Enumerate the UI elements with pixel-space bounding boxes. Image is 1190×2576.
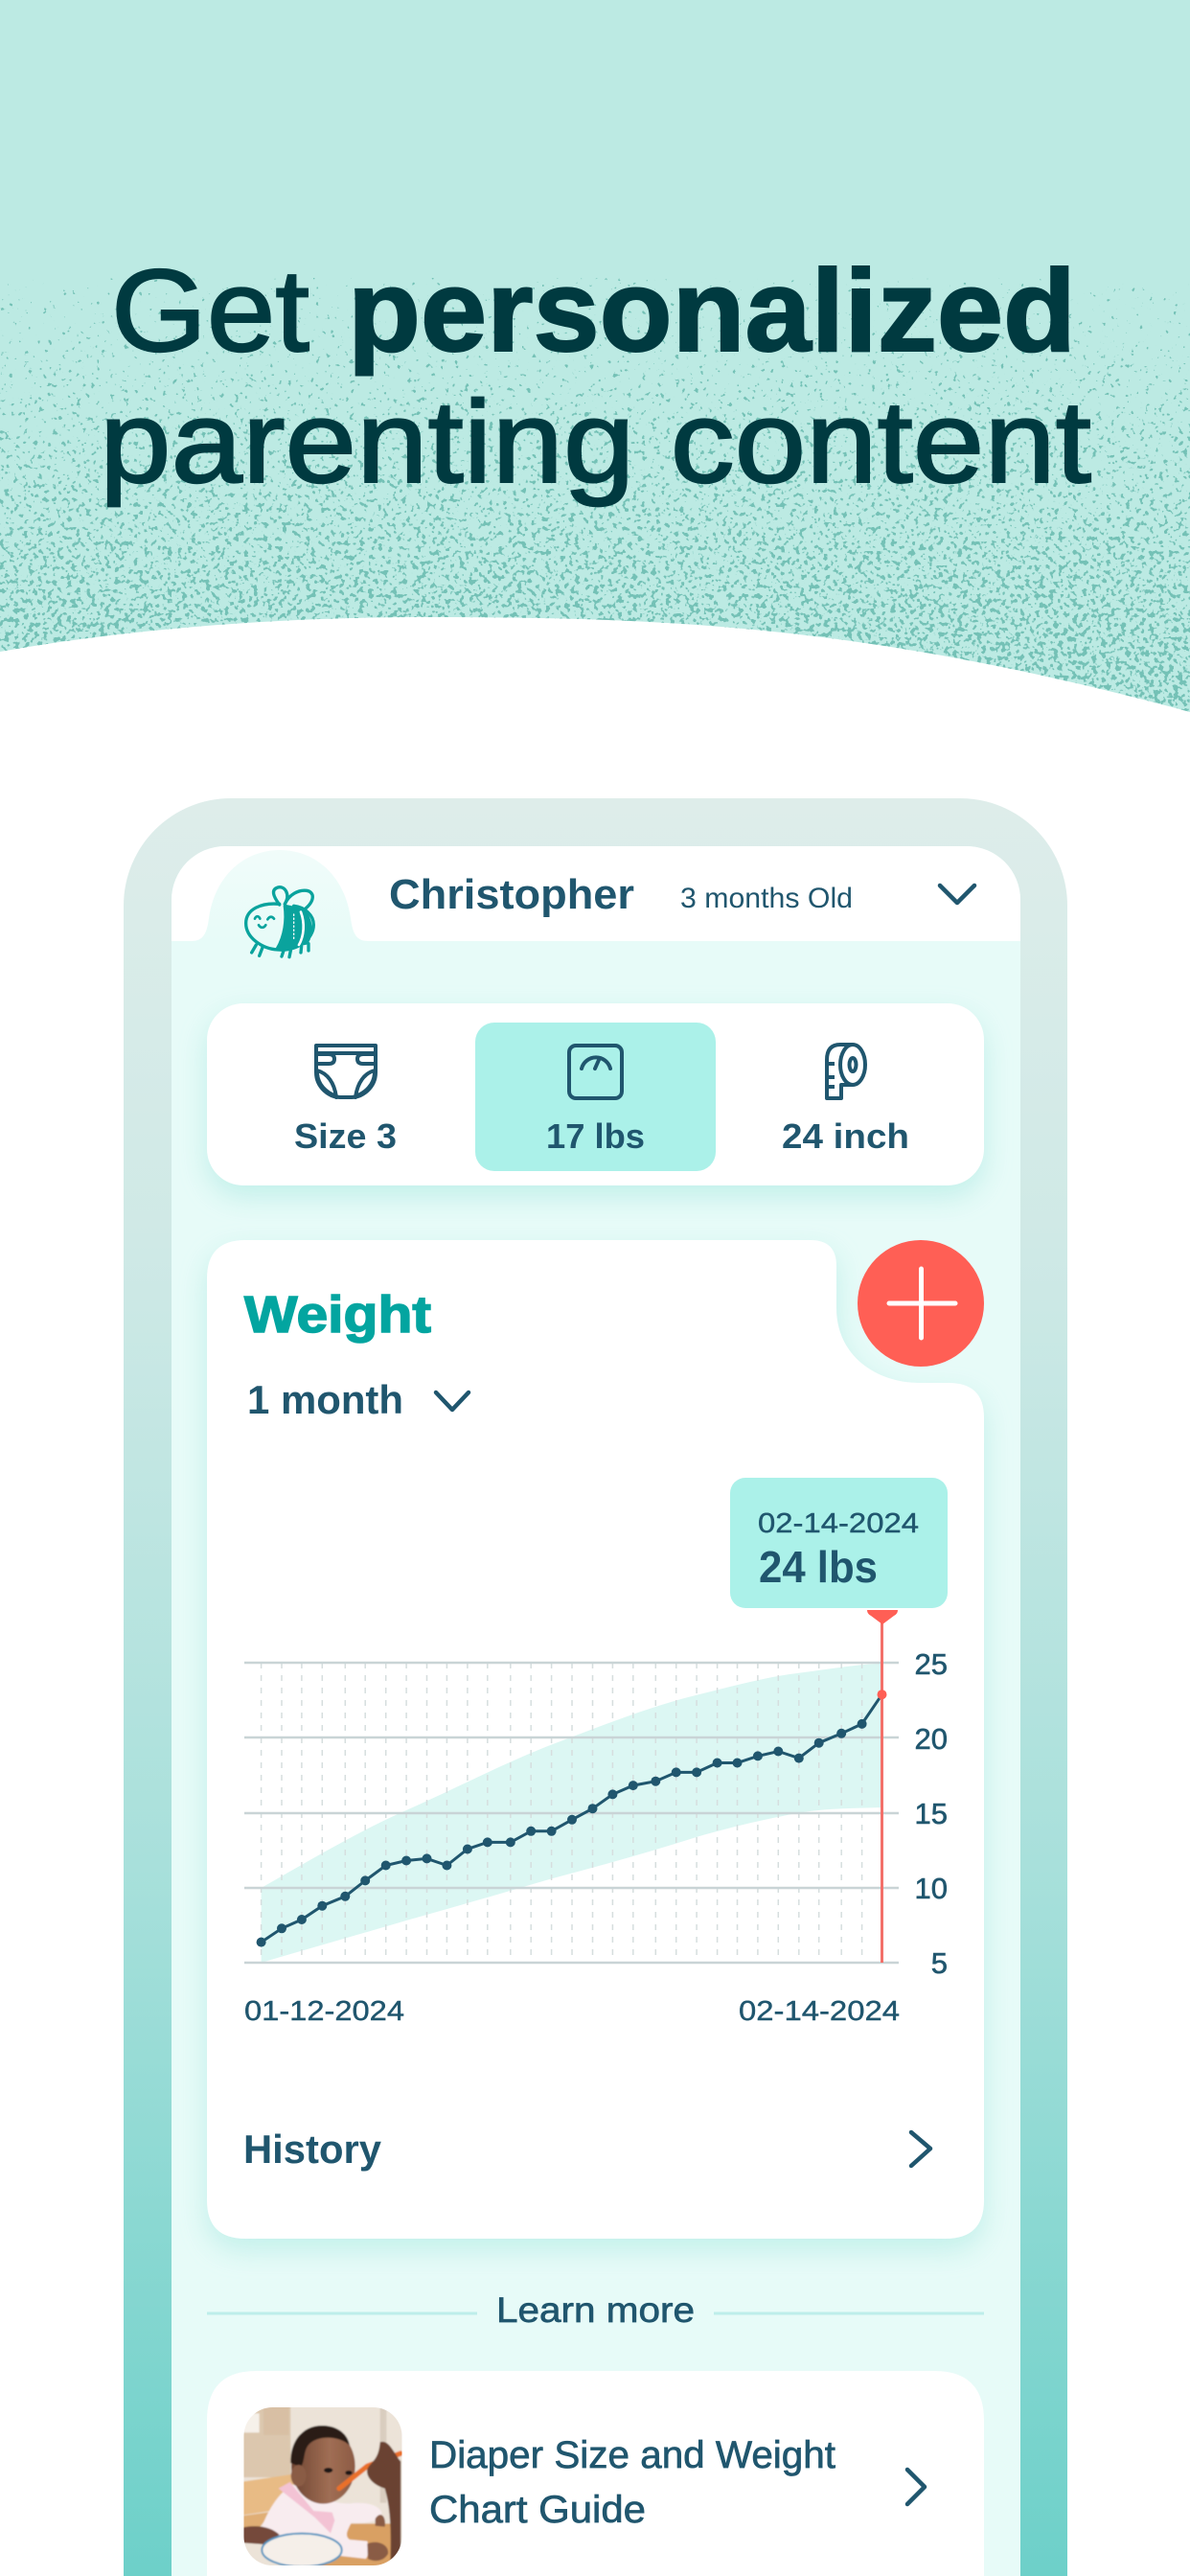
panel: article card xyxy=(207,2371,984,2576)
icon: header chevron xyxy=(940,886,974,903)
y axis labels: 25 xyxy=(915,1647,948,1681)
y axis labels: 5 xyxy=(931,1946,948,1980)
x axis start date: 01-12-2024 xyxy=(244,1996,404,2027)
lower hand xyxy=(240,2526,280,2544)
y axis labels: 10 xyxy=(915,1872,948,1905)
selected stat highlight xyxy=(475,1023,716,1171)
article title: Diaper Size and Weight xyxy=(429,2434,835,2476)
stat: diaper size: Size 3 xyxy=(294,1116,397,1156)
tooltip: 24 lbs xyxy=(759,1542,878,1592)
title xyxy=(100,245,1091,507)
y axis labels: 15 xyxy=(915,1797,948,1830)
article title xyxy=(429,2434,835,2531)
title: personalized xyxy=(348,245,1076,376)
tooltip xyxy=(730,1478,948,1608)
icon: measuring tape xyxy=(827,1045,865,1098)
app header xyxy=(172,846,1020,957)
panel: weight chart card xyxy=(207,1240,984,2239)
tooltip: 02-14-2024 xyxy=(758,1508,919,1539)
phone frame xyxy=(124,798,1067,2576)
article title: Chart Guide xyxy=(429,2489,646,2531)
learn more divider: Learn more xyxy=(496,2290,695,2330)
line chart xyxy=(244,1610,899,1963)
stat: height: 24 inch xyxy=(782,1116,909,1156)
y axis labels: 20 xyxy=(915,1722,948,1756)
title: parenting content xyxy=(100,377,1091,507)
child name: Christopher xyxy=(389,871,634,918)
article photo: baby being fed xyxy=(243,2407,402,2565)
child age: 3 months Old xyxy=(680,883,853,914)
avatar tab xyxy=(172,850,368,941)
card heading: Weight xyxy=(244,1286,431,1344)
title: Get xyxy=(111,245,309,376)
icon: scale xyxy=(569,1046,622,1098)
bowl xyxy=(262,2534,342,2566)
hero background with stippled wave xyxy=(0,0,1190,719)
stat: weight: 17 lbs xyxy=(546,1116,645,1156)
feeding hand and arm xyxy=(367,2442,400,2568)
icon: article chevron xyxy=(907,2470,925,2504)
icon: bee mascot xyxy=(246,887,313,957)
panel: stats selector xyxy=(207,1003,984,1185)
history row: History xyxy=(243,2127,382,2172)
baby body xyxy=(262,2484,381,2559)
icon: diaper xyxy=(316,1046,376,1097)
history row xyxy=(243,2127,930,2172)
period selector: 1 month xyxy=(247,1377,403,1422)
baby head xyxy=(291,2428,355,2504)
x axis end date: 02-14-2024 xyxy=(739,1996,900,2027)
y axis labels xyxy=(915,1647,948,1980)
spoon xyxy=(339,2453,400,2489)
add button xyxy=(858,1240,984,1367)
